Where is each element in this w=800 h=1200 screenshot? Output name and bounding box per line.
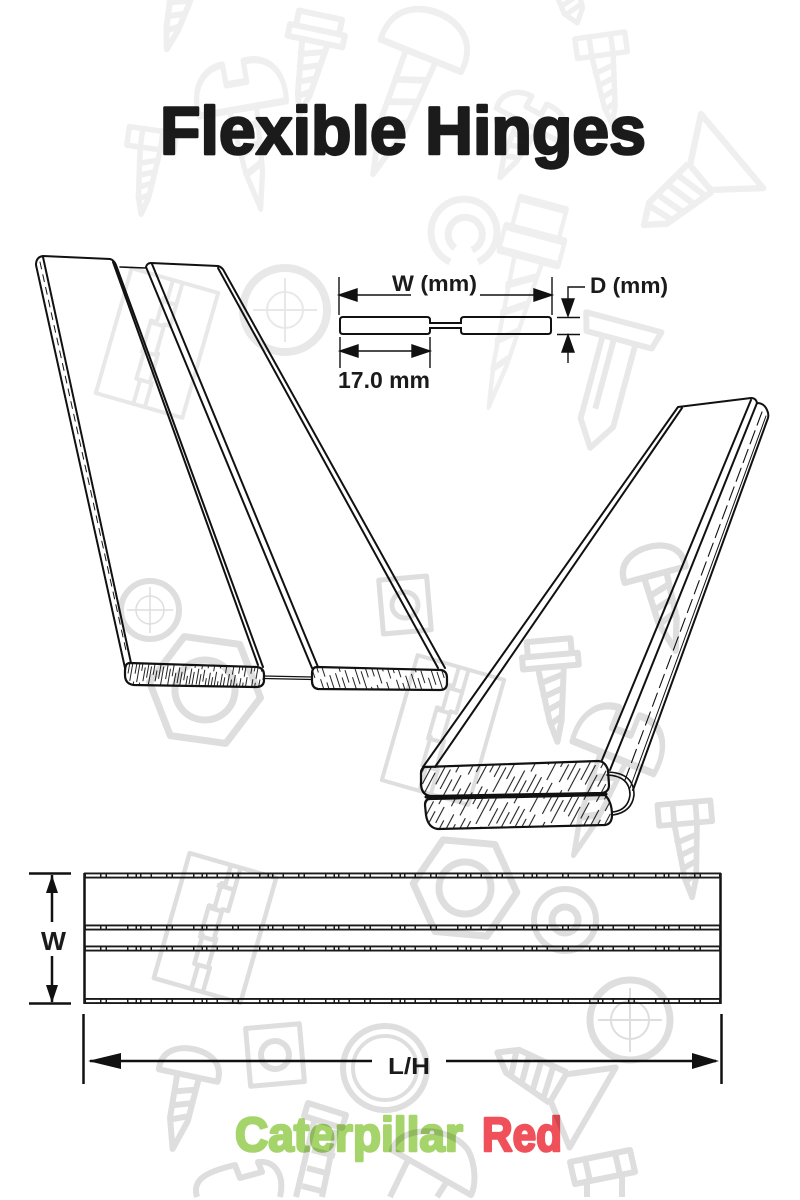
L/H dimension xyxy=(84,1014,722,1084)
17.0 arrows xyxy=(340,337,430,368)
hinge thread xyxy=(264,676,312,680)
D ticks and arrows xyxy=(557,287,585,363)
W ticks and arrows xyxy=(339,277,552,315)
bottom cross-section xyxy=(425,795,612,829)
left leaf edge dashes xyxy=(40,262,127,655)
right leaf outline xyxy=(146,263,445,668)
left leaf outline xyxy=(36,256,263,668)
left cross-section xyxy=(125,663,264,687)
band dashes xyxy=(86,876,719,1001)
hinge loop xyxy=(607,772,634,815)
right cross-section xyxy=(312,667,447,690)
W label: W xyxy=(41,926,66,956)
D (mm) label: D (mm) xyxy=(590,273,668,298)
folded leaf outline xyxy=(423,398,768,790)
diagram: open flat hinge, left view xyxy=(36,256,447,690)
diagram: flat hinge, front view xyxy=(29,872,722,1084)
hatched bands xyxy=(84,872,721,1004)
brand name: Caterpillar xyxy=(235,1109,463,1162)
17.0 mm label: 17.0 mm xyxy=(338,367,430,393)
L/H label: L/H xyxy=(388,1053,430,1079)
top cross-section xyxy=(421,761,609,796)
section profile xyxy=(340,317,551,334)
diagram: section dimensions xyxy=(338,271,668,393)
closing gap xyxy=(426,794,606,797)
centre web xyxy=(120,267,146,268)
diagram: folded hinge, right view xyxy=(421,398,768,829)
title: Flexible Hinges xyxy=(160,93,646,169)
brand name: Red xyxy=(482,1109,562,1162)
W dimension xyxy=(29,874,71,1004)
left and right edges xyxy=(84,873,720,1004)
spine dashes xyxy=(625,412,762,780)
W (mm) label: W (mm) xyxy=(392,271,477,296)
